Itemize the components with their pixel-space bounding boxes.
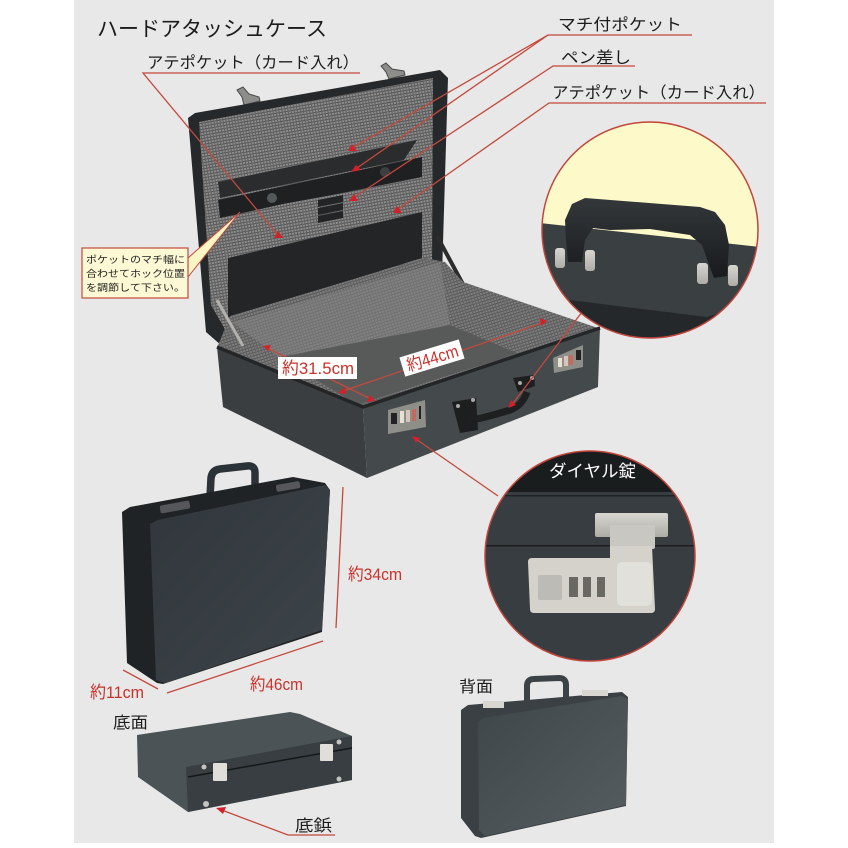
seam bbox=[188, 748, 352, 777]
lid shell bbox=[188, 70, 448, 346]
callout pointer bbox=[188, 212, 240, 277]
case top hardware bbox=[160, 500, 190, 514]
lower pocket mesh bbox=[228, 170, 422, 259]
dial lock leader arrow bbox=[412, 436, 498, 496]
leader markers bbox=[274, 144, 402, 238]
front end bbox=[186, 736, 352, 812]
left front face bbox=[217, 347, 367, 478]
carry handle bbox=[452, 375, 535, 433]
back panel bbox=[478, 696, 628, 836]
dimension: 11cm: 約11cm bbox=[90, 683, 144, 702]
dimension lines: closed case bbox=[123, 487, 343, 693]
black card pocket bbox=[228, 212, 422, 318]
left hinge strut bbox=[217, 300, 243, 346]
pen slots bbox=[318, 195, 343, 223]
main open attache case bbox=[188, 63, 600, 478]
label: pen holder: ペン差し bbox=[561, 49, 631, 67]
expansion pocket flap bbox=[218, 157, 422, 218]
lid hinge clasps bbox=[237, 63, 405, 105]
case rim bbox=[217, 328, 600, 407]
dimension label: width 44cm: 約44cm bbox=[405, 341, 461, 375]
handle posts bbox=[555, 248, 738, 286]
callout: adjust hook position: ポケットのマチ幅に bbox=[86, 254, 185, 266]
back fold band bbox=[232, 262, 450, 358]
right front face bbox=[363, 327, 600, 478]
callout: adjust hook position bbox=[82, 248, 188, 298]
label: dial lock: ダイヤル錠 bbox=[549, 462, 636, 481]
bottom view case bbox=[137, 712, 352, 812]
body bbox=[461, 692, 628, 838]
dimension: 46cm: 約46cm bbox=[250, 675, 303, 694]
floor bbox=[280, 325, 517, 405]
back view case bbox=[461, 678, 628, 838]
lock plate bbox=[528, 546, 655, 613]
right struts bbox=[437, 236, 465, 288]
detail circle: dial lock bbox=[484, 450, 696, 662]
hook snaps bbox=[267, 193, 277, 203]
hinge plate bbox=[595, 513, 668, 537]
handle bbox=[527, 678, 566, 702]
case front panel bbox=[150, 485, 330, 683]
case side bbox=[122, 477, 330, 684]
right combination lock bbox=[553, 345, 583, 373]
handle leader arrow bbox=[508, 312, 582, 408]
bottom stud arrow bbox=[216, 807, 335, 835]
label: bottom view: 底面 bbox=[113, 714, 148, 732]
right wall lining bbox=[450, 268, 590, 352]
callout: adjust hook position: 合わせてホック位置 bbox=[86, 268, 186, 280]
dimension: 34cm: 約34cm bbox=[348, 565, 402, 584]
label: pocket top left: アテポケット（カード入れ） bbox=[147, 54, 359, 72]
leader lines: pocket callouts bbox=[143, 35, 766, 235]
clasps bbox=[213, 763, 227, 781]
closed case with dimensions bbox=[122, 466, 330, 684]
label: bottom studs: 底鋲 bbox=[295, 817, 332, 835]
base back lining bbox=[217, 258, 598, 408]
dimension label: depth 31.5cm: 約31.5cm bbox=[282, 359, 354, 378]
rivets bbox=[202, 740, 342, 807]
lid lining bbox=[199, 78, 433, 338]
pen flap bbox=[218, 140, 417, 198]
handle bbox=[210, 466, 255, 498]
digit wheels bbox=[569, 577, 605, 597]
title: ハードアタッシュケース bbox=[97, 18, 327, 41]
detail circle: handle bbox=[540, 120, 760, 340]
handle grip bbox=[565, 198, 729, 278]
clasps bbox=[483, 701, 504, 708]
dimension arrows inside case bbox=[263, 318, 547, 402]
label: gusset pocket: マチ付ポケット bbox=[558, 16, 682, 34]
callout: adjust hook position: を調節して下さい。 bbox=[86, 282, 185, 294]
front combination lock bbox=[388, 400, 426, 434]
label: pocket top right: アテポケット（カード入れ） bbox=[552, 84, 765, 102]
label: back view: 背面 bbox=[459, 678, 493, 696]
